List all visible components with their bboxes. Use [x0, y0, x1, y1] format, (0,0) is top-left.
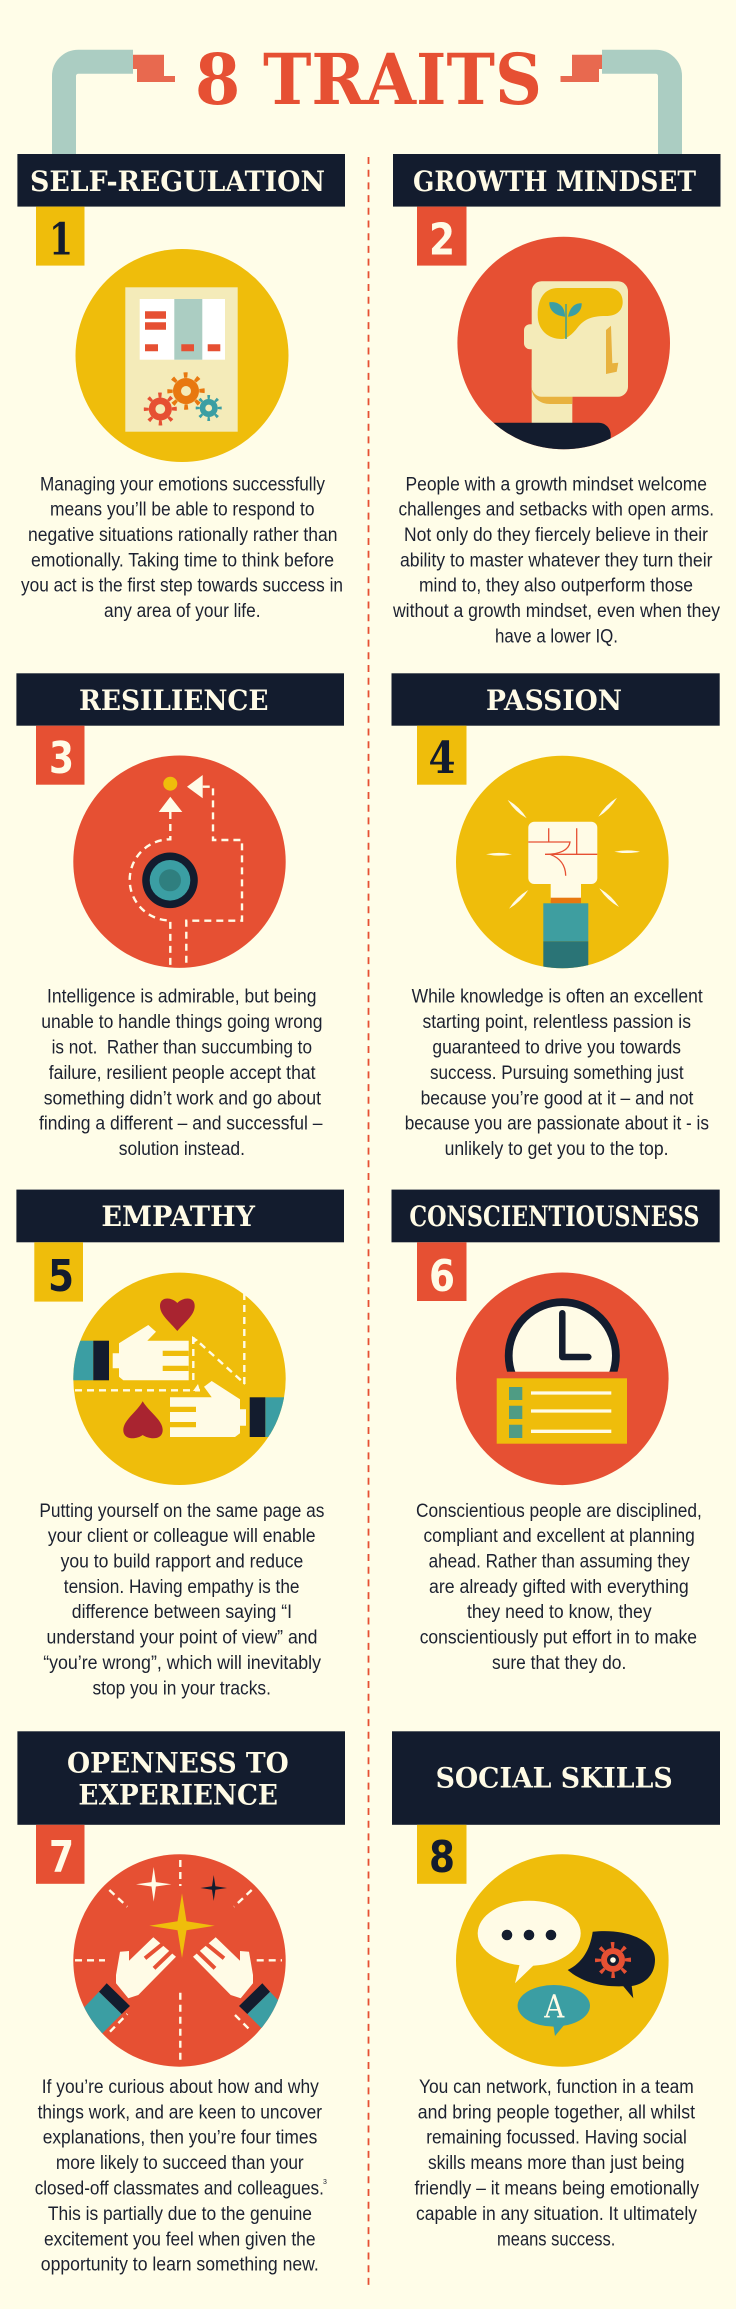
centre dashed divider [368, 157, 370, 2285]
text: self-regulation: Managing your emotions successfully [40, 474, 325, 495]
text: social skills: means success. [497, 2229, 615, 2250]
text: conscientiousness: they need to know, they [467, 1602, 652, 1623]
text: growth mindset: challenges and setbacks with open arms. [398, 500, 714, 521]
text: self-regulation [21, 474, 343, 622]
heading bar: openness to experience: EXPERIENCE [78, 1778, 278, 1812]
text: growth mindset: People with a growth mindset welcome [406, 474, 707, 495]
text: growth mindset: Not only do they fiercely believe in their [404, 525, 709, 546]
text: conscientiousness: ahead. Rather than assuming they [429, 1552, 690, 1572]
text: conscientiousness: compliant and excellent at planning [424, 1526, 695, 1547]
panel: growth mindset [392, 154, 720, 647]
text: empathy: understand your point of view” and [46, 1628, 317, 1649]
text: self-regulation: emotionally. Taking time to think before [31, 550, 334, 571]
text: resilience: solution instead. [119, 1139, 245, 1160]
text: self-regulation: any area of your life. [104, 601, 260, 622]
number badge 8: 8 [429, 1832, 455, 1883]
text: empathy: stop you in your tracks. [92, 1679, 271, 1700]
text: self-regulation: negative situations rationally rather than [28, 525, 338, 546]
icon: path with target [73, 756, 286, 968]
icon: head with growing plant [457, 236, 670, 450]
text: empathy: you to build rapport and reduce [61, 1552, 303, 1572]
text: passion: While knowledge is often an excellent [412, 987, 703, 1008]
number badge 4: 4 [428, 733, 456, 784]
heading bar: empathy [16, 1190, 344, 1242]
panel: social skills [392, 1731, 720, 2250]
text: openness to experience: more likely to succeed than your [56, 2153, 304, 2174]
text: empathy: your client or colleague will enable [48, 1526, 316, 1547]
text: empathy: “you’re wrong”, which will inevitably [43, 1653, 321, 1674]
text: resilience [39, 987, 323, 1160]
text: empathy [39, 1501, 324, 1700]
text: conscientiousness: are already gifted with everything [429, 1577, 689, 1598]
number badge 6 [417, 1242, 466, 1302]
text: growth mindset: have a lower IQ. [495, 626, 618, 647]
panel: empathy [16, 1190, 344, 1700]
number badge 3 [36, 726, 84, 785]
text: growth mindset [392, 474, 720, 647]
text: openness to experience: explanations, then you’re four times [43, 2128, 317, 2149]
icon: document with gears [76, 249, 288, 462]
heading bar: self-regulation: SELF-REGULATION [30, 165, 325, 198]
number badge 7: 7 [49, 1832, 74, 1883]
text: openness to experience: This is partially due to the genuine [48, 2204, 312, 2225]
text: openness to experience: opportunity to learn something new. [41, 2255, 319, 2276]
text: social skills: remaining focussed. Having social [426, 2128, 687, 2149]
icon: speech bubbles: A [543, 1988, 565, 2026]
number badge 1 [36, 207, 84, 266]
text: resilience: is not. Rather than succumbing to [52, 1038, 312, 1059]
text: social skills: capable in any situation. It ultimately [416, 2204, 697, 2225]
text: resilience: unable to handle things going wrong [41, 1012, 323, 1033]
number badge 4 [417, 726, 466, 785]
text: passion [405, 987, 709, 1160]
heading bar: passion: PASSION [486, 684, 622, 717]
text: empathy: difference between saying “I [72, 1602, 292, 1623]
text: openness to experience: closed-off classmates and colleagues. [35, 2178, 324, 2199]
text: openness to experience: If you’re curious about how and why [42, 2077, 319, 2098]
number badge 5 [34, 1242, 83, 1302]
pipe: right [560, 55, 670, 154]
heading bar: passion [392, 673, 720, 726]
text: social skills: You can network, function in a team [419, 2077, 694, 2098]
icon: raised fist [456, 756, 669, 971]
panel: passion [392, 673, 720, 1160]
number badge 2 [417, 207, 466, 266]
pipe: left [64, 55, 175, 154]
text: growth mindset: ability to master whatever they turn their [400, 550, 713, 571]
heading bar: empathy: EMPATHY [101, 1200, 256, 1233]
number badge 2: 2 [429, 215, 455, 266]
heading bar: openness to experience [17, 1731, 345, 1825]
number badge 6: 6 [429, 1251, 455, 1302]
text: openness to experience [35, 2077, 327, 2276]
text: conscientiousness [416, 1501, 702, 1674]
text: openness to experience: excitement you feel when given the [44, 2229, 316, 2250]
heading bar: resilience [16, 673, 344, 726]
text: social skills: friendly – it means being emotionally [414, 2178, 699, 2199]
heading bar: self-regulation [17, 154, 345, 207]
text: passion: because you’re good at it – and not [421, 1088, 694, 1109]
text: passion: success. Pursuing something just [430, 1063, 684, 1084]
text: self-regulation: you act is the first step towards success in [21, 576, 343, 597]
panel: conscientiousness [392, 1190, 720, 1674]
heading bar: growth mindset [393, 154, 720, 207]
text: empathy: Putting yourself on the same page as [39, 1501, 324, 1522]
number badge 3: 3 [49, 733, 74, 784]
icon: clock and checklist [456, 1272, 669, 1485]
text: passion: guaranteed to drive you towards [432, 1038, 681, 1059]
text: self-regulation: means you’ll be able to respond to [50, 500, 314, 521]
number badge 5: 5 [48, 1251, 74, 1302]
icon: hands reaching for stars [73, 1854, 289, 2067]
heading bar: growth mindset: GROWTH MINDSET [413, 165, 696, 198]
icon: two hands and hearts [70, 1273, 289, 1485]
text: resilience: Intelligence is admirable, but being [47, 987, 316, 1008]
number badge 7 [36, 1825, 84, 1884]
text: resilience: something didn’t work and go about [44, 1088, 322, 1109]
heading bar: social skills: SOCIAL SKILLS [436, 1762, 673, 1795]
text: conscientiousness: sure that they do. [492, 1653, 626, 1674]
text: conscientiousness: conscientiously put effort in to make [420, 1628, 697, 1649]
text: social skills: and bring people together, all whilst [418, 2102, 696, 2123]
text: growth mindset: mind to, they also outperform those [419, 576, 693, 597]
panel: self-regulation [17, 154, 345, 622]
number badge 8 [417, 1825, 466, 1884]
text: social skills [414, 2077, 699, 2250]
text: resilience: finding a different – and successful – [39, 1114, 323, 1135]
text: passion: unlikely to get you to the top. [445, 1139, 668, 1160]
panel: openness to experience [17, 1731, 345, 2276]
heading bar: conscientiousness [392, 1190, 720, 1242]
icon: speech bubbles [456, 1854, 669, 2067]
text: conscientiousness: Conscientious people are disciplined, [416, 1501, 702, 1522]
heading bar: openness to experience: OPENNESS TO [67, 1747, 289, 1780]
number badge 1: 1 [49, 215, 73, 266]
text: passion: because you are passionate about it - is [405, 1114, 709, 1135]
text: passion: starting point, relentless passion is [422, 1012, 691, 1033]
text: openness to experience: things work, and are keen to uncover [38, 2102, 323, 2123]
text: social skills: skills means more than just being [428, 2153, 684, 2174]
title: 8 TRAITS [195, 38, 542, 121]
panel: resilience [16, 673, 344, 1160]
text: resilience: failure, resilient people accept that [49, 1063, 316, 1084]
text: openness to experience: 3 [323, 2179, 327, 2186]
heading bar: resilience: RESILIENCE [79, 684, 268, 717]
heading bar: social skills [392, 1731, 720, 1825]
text: empathy: tension. Having empathy is the [64, 1577, 299, 1598]
